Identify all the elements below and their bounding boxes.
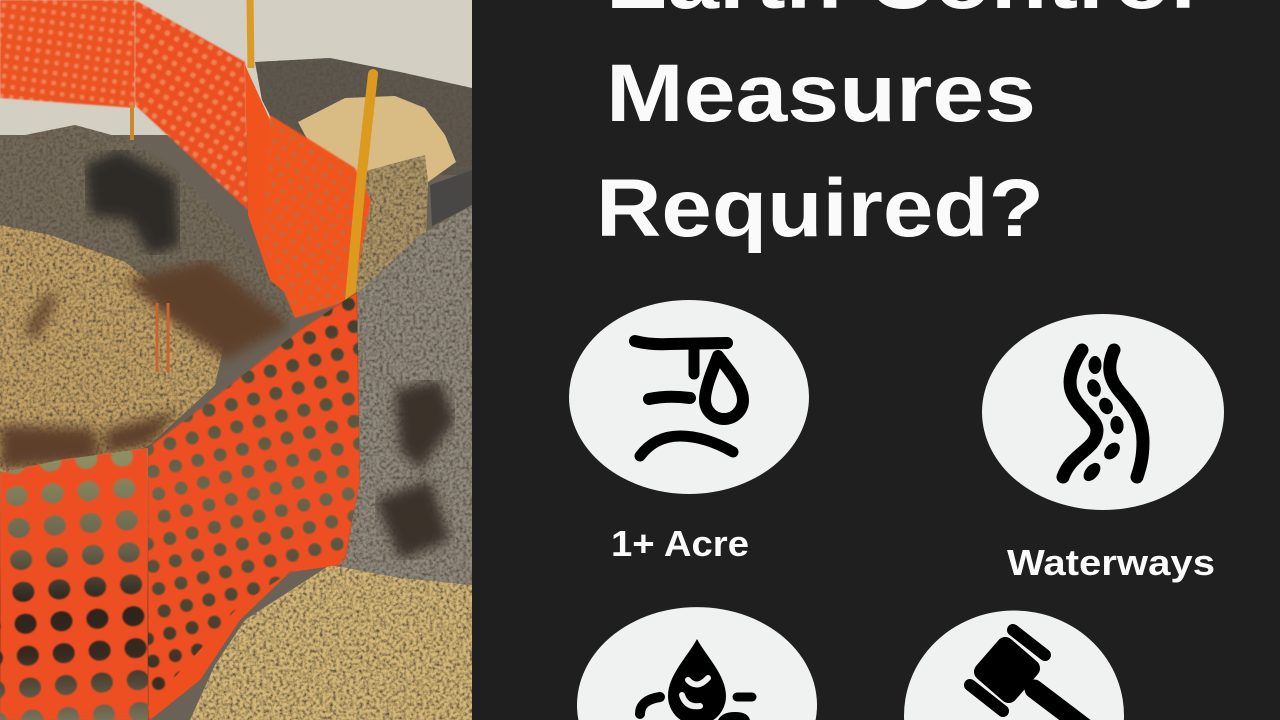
badge circle <box>577 607 817 720</box>
left gravel mound <box>0 125 295 345</box>
fence post: back <box>250 0 251 68</box>
title <box>596 0 1196 254</box>
grey boulder behind sand <box>430 170 472 226</box>
lower sand slope <box>352 155 428 300</box>
fence: top left panel <box>0 0 135 108</box>
fence: solid bottom hem <box>148 552 345 720</box>
right gravel shadows <box>375 380 455 560</box>
pavement <box>0 0 472 150</box>
icon: gavel <box>970 630 1091 720</box>
fence: lower panel right, backing seen through holes <box>148 292 360 720</box>
badge circle <box>569 300 809 494</box>
icon: land with water drop <box>635 341 743 456</box>
badge circle <box>982 314 1224 510</box>
fence: lower panel left, backing seen through holes <box>0 448 148 720</box>
fence: right panel <box>262 115 371 318</box>
fence post: front <box>350 74 373 300</box>
dark hollow <box>85 150 180 255</box>
excavation rim <box>255 58 472 175</box>
card: 1+ Acre <box>569 300 809 564</box>
small orange stakes <box>157 303 168 372</box>
badge circle <box>904 611 1124 720</box>
label: Waterways <box>1007 542 1215 583</box>
title: Measures <box>606 48 1036 139</box>
sand mound <box>298 96 456 300</box>
fence: solid fold <box>245 65 300 305</box>
card: regulations <box>904 611 1124 720</box>
label: 1+ Acre <box>611 523 749 564</box>
title: Required? <box>596 163 1044 254</box>
right gravel pile <box>340 205 472 585</box>
straw shadows <box>0 260 290 470</box>
fence: upper middle panel <box>135 0 248 210</box>
left straw bales <box>0 225 225 475</box>
foreground straw bale <box>190 565 472 720</box>
fence post: centre <box>130 105 134 140</box>
fence: lower panel left, mesh <box>0 448 148 720</box>
fence: lower panel right, mesh <box>148 292 360 720</box>
card: water quality <box>577 607 817 720</box>
icon: water drop <box>640 639 752 720</box>
ground base <box>0 135 472 720</box>
panel: construction site photo with silt fence <box>0 0 472 720</box>
card: Waterways <box>982 314 1224 583</box>
icon: winding waterway <box>1063 350 1143 484</box>
